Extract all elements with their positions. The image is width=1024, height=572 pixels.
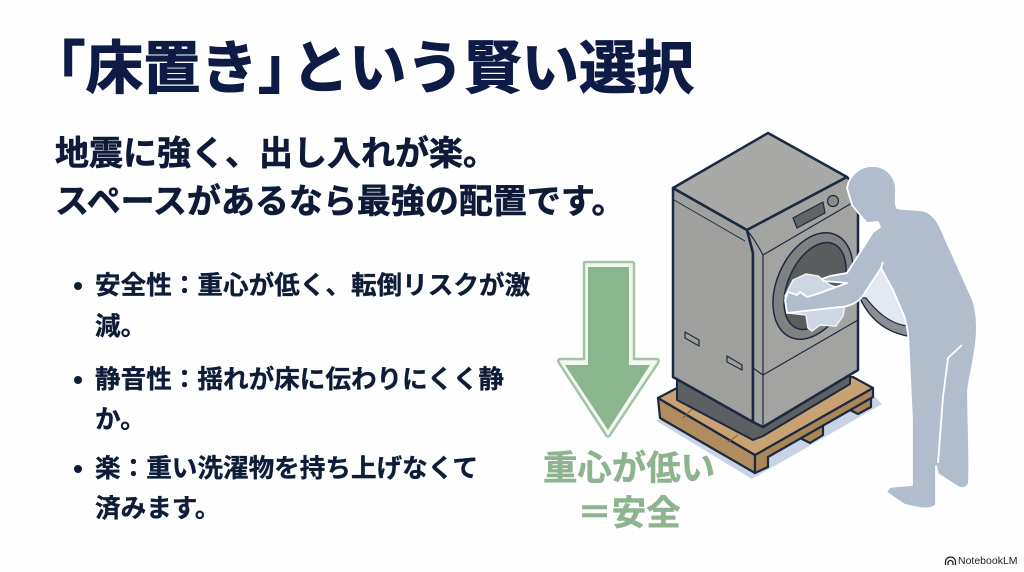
person silhouette <box>785 166 977 508</box>
bullet list: 済みます。 <box>95 495 220 523</box>
bullet list <box>74 271 530 523</box>
subtitle: 地震に強く、出し入れが楽。 <box>55 135 497 173</box>
deck <box>658 377 873 455</box>
base <box>677 365 850 440</box>
right beam <box>755 388 873 473</box>
washing machine <box>673 133 908 440</box>
caption: low centre of gravity = safe: ＝安全 <box>577 495 681 533</box>
bullet list: 減。 <box>95 313 146 341</box>
brand label: NotebookLM <box>958 555 1018 567</box>
bullet: easy <box>74 454 478 523</box>
title: 「床置き」という賢い選択 <box>28 37 694 101</box>
arrow: low centre of gravity <box>558 262 659 436</box>
left beam <box>658 398 755 473</box>
front <box>747 177 858 427</box>
pallet <box>655 377 882 479</box>
icon: NotebookLM logo <box>946 557 956 565</box>
bullet list: 楽：重い洗濯物を持ち上げなくて <box>95 455 478 483</box>
subtitle <box>55 134 626 221</box>
left side <box>673 188 753 422</box>
rear legs <box>800 418 823 443</box>
bullet: safety <box>74 271 530 341</box>
bullet: quiet <box>74 365 504 434</box>
control panel <box>793 202 825 228</box>
caption: low centre of gravity = safe: 重心が低い <box>543 450 715 488</box>
bullet list: 安全性：重心が低く、転倒リスクが激 <box>95 272 530 300</box>
subtitle: スペースがあるなら最強の配置です。 <box>55 183 626 221</box>
top <box>673 133 847 230</box>
bullet list: か。 <box>95 406 146 434</box>
floor shadow <box>655 395 882 479</box>
laundry <box>785 274 845 331</box>
door ring <box>757 220 869 352</box>
open door <box>860 240 908 336</box>
caption: low centre of gravity = safe <box>543 450 715 533</box>
bullet list: 静音性：揺れが床に伝わりにくく静 <box>95 366 504 394</box>
handles <box>685 332 699 346</box>
